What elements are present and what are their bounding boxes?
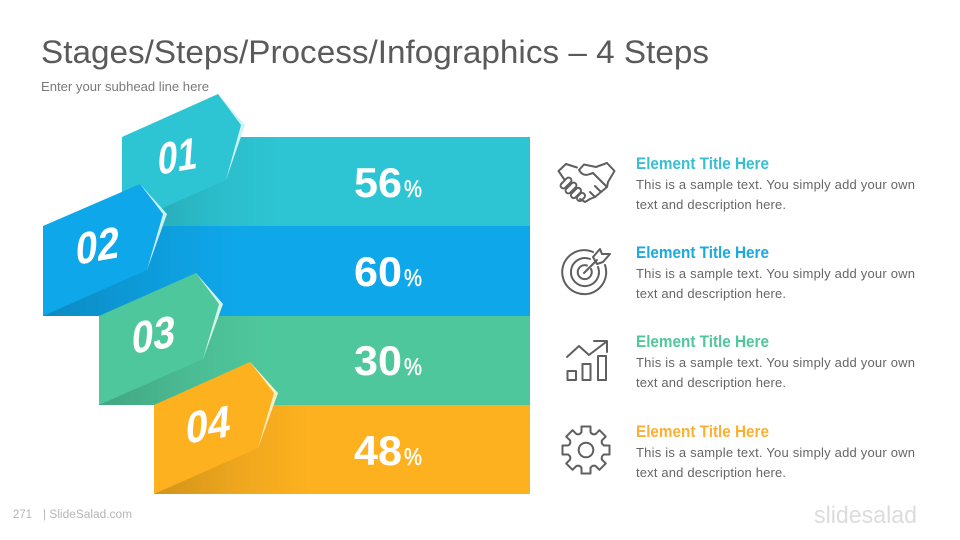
percent 60 [354, 248, 422, 295]
icon: growth chart [567, 341, 607, 380]
subhead: Enter your subhead line here [41, 80, 209, 94]
icon: target [562, 249, 610, 294]
text block: element 2: Element Title Here [636, 244, 769, 262]
percent 30: % [404, 354, 422, 381]
text block: element 3: text and description here. [636, 375, 786, 390]
title: Stages/Steps/Process/Infographics – 4 Steps [41, 34, 709, 70]
percent 48 [354, 427, 422, 474]
percent 48: 48 [354, 427, 402, 474]
tag number 03: 03 [130, 307, 177, 364]
step 1 band and tag [122, 94, 530, 226]
percent 60: 60 [354, 248, 402, 295]
percent 30 [354, 337, 422, 384]
text block: element 1: This is a sample text. You simply add your own [636, 177, 915, 192]
text block: element 2 [636, 244, 915, 301]
percent 56 [354, 159, 422, 206]
text block: element 2: This is a sample text. You simply add your own [636, 266, 915, 281]
tag number 02: 02 [74, 218, 121, 275]
footer page number: | SlideSalad.com [43, 509, 132, 521]
text block: element 3: Element Title Here [636, 333, 769, 351]
text block: element 1: Element Title Here [636, 155, 769, 173]
percent 56: % [404, 176, 422, 203]
text block: element 1: text and description here. [636, 197, 786, 212]
text block: element 4: Element Title Here [636, 423, 769, 441]
logo wordmark: slidesalad [814, 502, 917, 529]
text block: element 3 [636, 333, 915, 390]
text block: element 4: text and description here. [636, 465, 786, 480]
step 2 band and tag [43, 184, 530, 316]
text block: element 4: This is a sample text. You simply add your own [636, 445, 915, 460]
step 3 band and tag [99, 273, 530, 405]
percent 56: 56 [354, 159, 402, 206]
step 4 band and tag [154, 362, 530, 494]
percent 60: % [404, 265, 422, 292]
icon: handshake [558, 163, 614, 202]
percent 48: % [404, 444, 422, 471]
text block: element 1 [636, 155, 915, 212]
icon: gear [562, 426, 610, 474]
tag number 04: 04 [184, 397, 232, 454]
percent 30: 30 [354, 337, 402, 384]
text block: element 2: text and description here. [636, 286, 786, 301]
tag number 01: 01 [156, 129, 199, 185]
footer page number: 271 [13, 509, 32, 521]
text block: element 3: This is a sample text. You simply add your own [636, 355, 915, 370]
text block: element 4 [636, 423, 915, 480]
